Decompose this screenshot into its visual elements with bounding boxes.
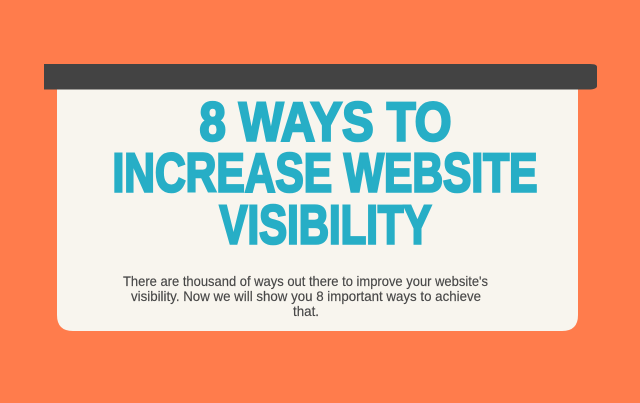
intro text: that.: [293, 303, 319, 319]
title: 8 WAYS TO: [200, 91, 452, 153]
title: [112, 91, 538, 256]
panel: cream card: [57, 88, 578, 331]
intro text: visibility. Now we will show you 8 important ways to achieve: [131, 288, 481, 304]
intro text: [123, 273, 488, 319]
title: VISIBILITY: [220, 194, 432, 256]
intro text: There are thousand of ways out there to improve your website's: [123, 273, 488, 289]
dark top bar: [44, 64, 597, 90]
